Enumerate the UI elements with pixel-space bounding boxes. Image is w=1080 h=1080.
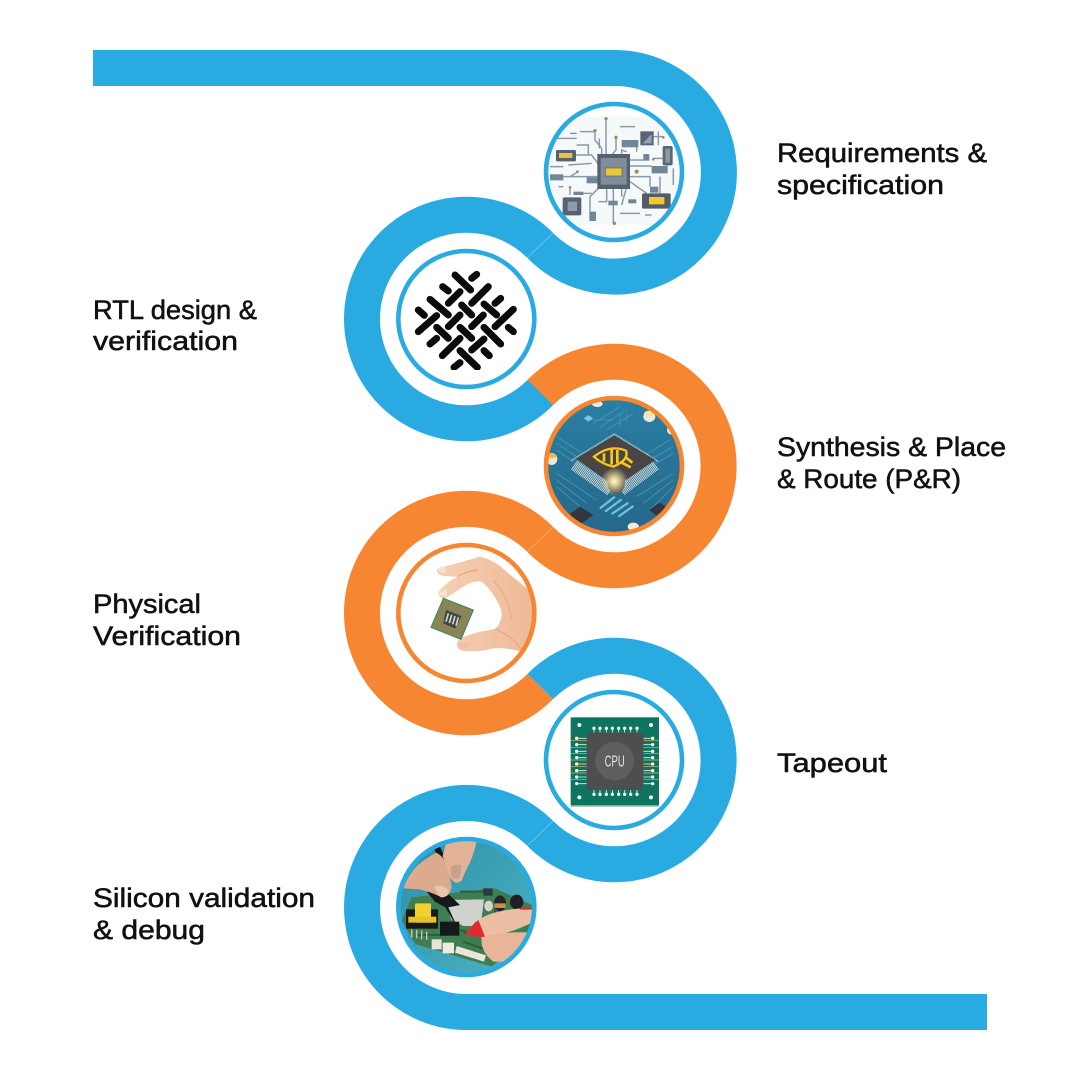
step 4: physical verification [93, 545, 537, 681]
ribbon: orange middle section [362, 362, 719, 717]
step 6: silicon validation and debug [93, 839, 537, 980]
label: Silicon validation [93, 883, 315, 913]
icon: woven black lines [414, 270, 517, 370]
icon: hand holding a chip [431, 557, 537, 652]
ribbon: blue bottom section [362, 656, 987, 1012]
label: Requirements & [777, 138, 987, 168]
icon: green CPU board: CPU [605, 754, 625, 771]
icon: circuit board with processor [548, 117, 678, 225]
step 3: synthesis, place and route [543, 397, 1006, 537]
step 1: requirements and specification [540, 100, 987, 243]
label: Physical [93, 589, 201, 619]
ring [398, 839, 534, 975]
ribbon: blue top section [93, 68, 719, 423]
label: Tapeout [777, 748, 888, 778]
label: specification [777, 170, 944, 200]
infographic: winding ribbon process flow [92, 50, 1006, 1030]
icon: green CPU board [571, 717, 659, 807]
ring [546, 398, 682, 534]
icon: chip on blue board [548, 400, 680, 532]
ring [546, 104, 682, 240]
step 5: tapeout [546, 692, 888, 828]
ring [398, 545, 534, 681]
label: Synthesis & Place [777, 432, 1006, 462]
label: verification [93, 326, 238, 356]
label: & Route (P&R) [777, 464, 961, 494]
label: Verification [93, 621, 241, 651]
label: & debug [93, 915, 205, 945]
ring [398, 251, 534, 387]
label: RTL design & [93, 295, 257, 325]
step 2: RTL design and verification [93, 251, 534, 390]
icon: hands probing a circuit board [400, 841, 532, 973]
ring [546, 692, 682, 828]
